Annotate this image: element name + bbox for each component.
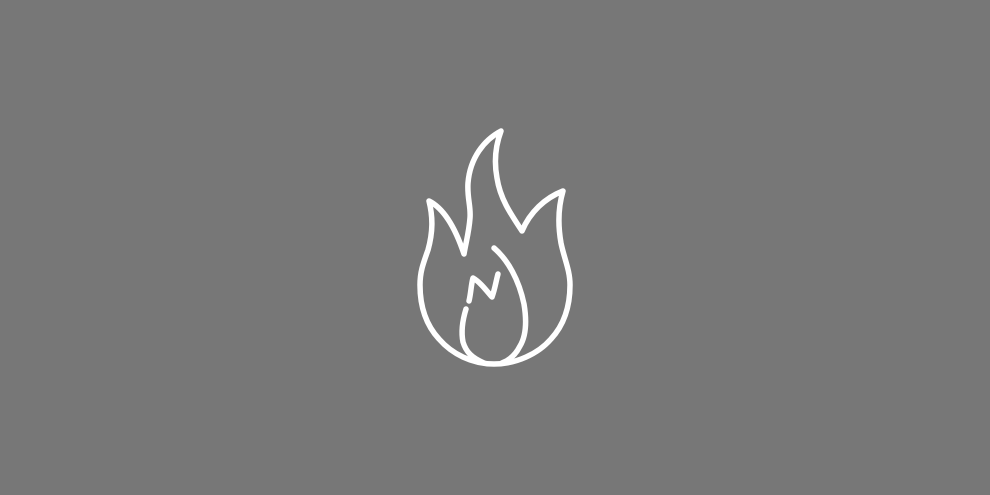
flame outer outline [420, 131, 570, 364]
flame inner spark [469, 274, 498, 301]
icon: flame [420, 131, 570, 364]
flame inner right contour [494, 248, 526, 363]
flame inner left contour [462, 309, 484, 363]
